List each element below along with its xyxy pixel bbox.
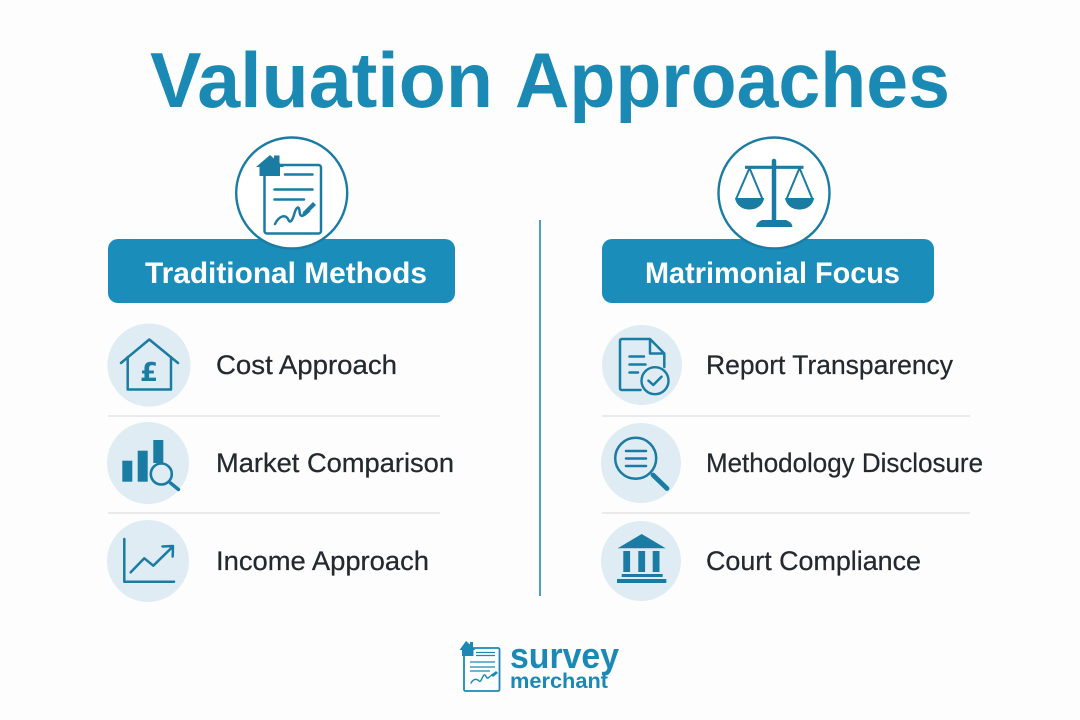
title: Valuation xyxy=(150,36,493,124)
icon: logo document xyxy=(460,641,500,691)
row: income approach xyxy=(107,520,429,602)
label: Cost Approach xyxy=(216,350,397,380)
icon: bars with magnifier xyxy=(107,422,189,504)
icon: report with check xyxy=(602,325,682,405)
banner: traditional methods: Traditional Methods xyxy=(145,257,427,290)
label: Methodology Disclosure xyxy=(706,448,983,478)
logo: survey merchant xyxy=(460,635,619,693)
banner: matrimonial focus: Matrimonial Focus xyxy=(645,257,900,290)
row: methodology disclosure xyxy=(601,423,983,503)
label: Income Approach xyxy=(216,546,429,576)
row: cost approach xyxy=(108,324,397,406)
label: Market Comparison xyxy=(216,448,454,478)
icon: scales of justice xyxy=(718,138,830,248)
row: market comparison xyxy=(107,422,454,504)
icon: house with pound xyxy=(108,324,190,406)
title xyxy=(150,36,950,124)
logo wordmark: merchant xyxy=(510,670,608,693)
logo wordmark: survey xyxy=(510,635,619,676)
banner: traditional methods xyxy=(108,239,455,303)
logo wordmark xyxy=(510,635,619,693)
center divider xyxy=(539,220,541,596)
banner: matrimonial focus xyxy=(602,239,934,303)
label: Report Transparency xyxy=(706,350,953,380)
row: report transparency xyxy=(602,325,953,405)
title: Approaches xyxy=(515,36,950,124)
row: court compliance xyxy=(601,521,921,601)
icon: rising line chart xyxy=(107,520,189,602)
icon: magnifier with lines xyxy=(601,423,681,503)
panel: traditional methods xyxy=(107,138,455,602)
panel: matrimonial focus xyxy=(601,138,983,601)
icon: courthouse xyxy=(601,521,681,601)
icon: house with pound: £ xyxy=(140,358,158,388)
icon: property report document xyxy=(236,138,347,248)
label: Court Compliance xyxy=(706,546,921,576)
